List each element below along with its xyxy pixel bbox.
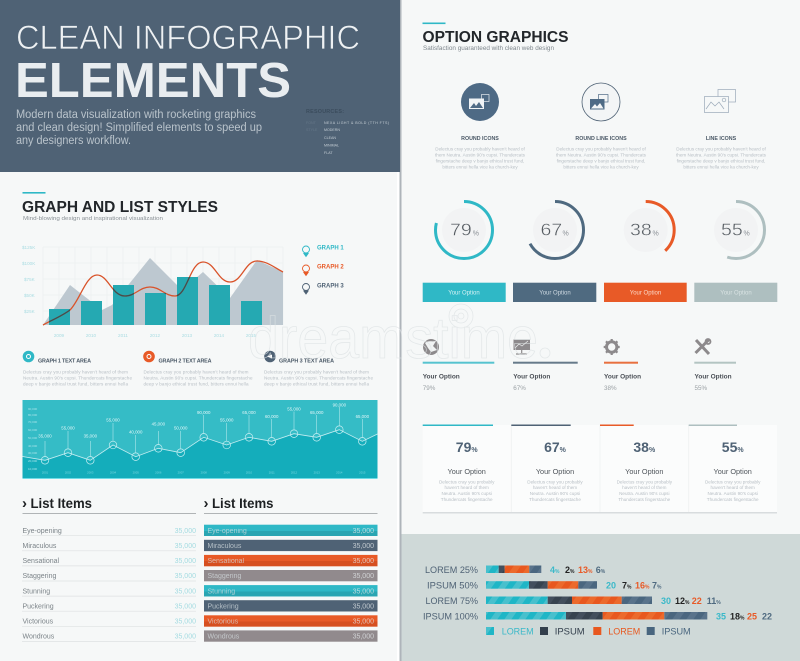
icon labels: [461, 136, 737, 142]
list rows: Eye-opening: [22, 528, 62, 535]
legend: graph pins: GRAPH 3: [317, 284, 344, 290]
y axis labels: $100K: [22, 261, 36, 266]
chart: mixed area, bar and line: [22, 245, 283, 338]
value labels: 7%: [622, 580, 632, 590]
card: 67 percent: Delectus cray you probably: [527, 479, 583, 484]
icon descriptions: bitters ennui hella vice ka church-key: [683, 164, 759, 170]
card: 55 percent: 55%: [722, 439, 744, 455]
list rows: 35,000: [175, 528, 196, 535]
card: 79 percent: Neutra. Austin 90's cupsi: [441, 491, 492, 496]
header description: [16, 109, 262, 147]
x axis ticks: 2004: [110, 470, 117, 474]
option buttons: Your Option: [720, 290, 752, 296]
panel divider: [400, 0, 402, 661]
icon labels: ROUND LINE ICONS: [575, 136, 627, 142]
bar rows: 35,000: [353, 558, 374, 565]
resources list: [306, 109, 389, 155]
y axis scale: 40,000: [28, 444, 38, 448]
value labels: [550, 565, 772, 621]
donut: 55 percent: [708, 202, 764, 258]
teal bars series: [49, 277, 262, 325]
legend: graph pins: GRAPH 2: [317, 264, 344, 270]
data labels: 90,000: [333, 402, 347, 408]
value labels: 2%: [565, 565, 575, 575]
bar rows: 35,000: [353, 604, 374, 610]
card: 38 percent: Neutra. Austin 90's cupsi: [619, 491, 670, 496]
card: 79 percent: Your Option: [448, 467, 486, 476]
list rows: [22, 528, 196, 642]
option stat columns: Your Option: [694, 374, 732, 380]
panel: graph and list styles heading: [22, 192, 218, 222]
panel: stacked bars: [402, 534, 800, 661]
section subtitle: Satisfaction guaranteed with clean web design: [423, 45, 554, 52]
icon: teal badge: [23, 351, 34, 362]
card: 55 percent: Your Option: [714, 467, 752, 476]
text area: graph 2: Neutra. Austin 90's cupsi. Thundercats fingerstache: [144, 376, 253, 380]
y axis scale: 50,000: [28, 436, 38, 440]
chart: teal area line chart: [22, 400, 378, 479]
donut charts: [436, 202, 764, 258]
value labels: 6%: [596, 565, 606, 575]
icon descriptions: them Neutra. Austin 90's cupsi. Thundercats: [435, 152, 526, 158]
value labels: 12%: [675, 596, 690, 606]
icon descriptions: fingerstache deep v banjo ethical trust fund,: [557, 158, 645, 164]
data labels: [38, 402, 370, 438]
icon descriptions: bitters ennui hella vice ka church-key: [563, 164, 639, 170]
icon labels: ROUND ICONS: [461, 136, 499, 142]
data labels: 40,000: [129, 429, 143, 434]
bar rows: Miraculous: [208, 543, 242, 550]
header description: Modern data visualization with rocketing graphics: [16, 109, 256, 121]
option stat columns: Your Option: [604, 374, 641, 380]
title line one: CLEAN INFOGRAPHIC: [16, 19, 360, 57]
icon: slate badge: [264, 351, 276, 362]
icon descriptions: them Neutra. Austin 90's cupsi. Thundercats: [676, 152, 767, 158]
card: 38 percent: 38%: [633, 439, 656, 455]
text area: graph 1: Neutra. Austin 90's cupsi. Thundercats fingerstache: [23, 376, 132, 380]
row 75 percent bars: [486, 596, 652, 604]
bar rows: Eye-opening: [208, 528, 247, 535]
y axis labels: [22, 245, 36, 314]
icon: gear: [604, 339, 620, 355]
donut: 79 percent: [436, 202, 492, 258]
row labels: IPSUM 50%: [427, 580, 479, 591]
panel: plain list: [22, 495, 196, 642]
x axis ticks: 2012: [291, 470, 298, 474]
donut: 38 percent: 38: [630, 220, 652, 240]
y axis labels: $25K: [24, 309, 36, 314]
bar rows: 35,000: [353, 618, 374, 626]
row 100 percent bars: [486, 612, 707, 620]
data labels: 55,000: [61, 426, 75, 431]
card: 38 percent: Your Option: [625, 467, 663, 476]
row labels: LOREM 75%: [426, 596, 479, 607]
value labels: 4%: [550, 565, 560, 575]
resources list: NEXA LIGHT & BOLD (TTH FTS): [324, 121, 389, 125]
header description: any designers workflow.: [16, 135, 131, 147]
series line: [22, 430, 378, 460]
card: 67 percent: Your Option: [536, 467, 574, 476]
x axis ticks: 2010: [246, 470, 253, 474]
icon descriptions: [435, 146, 767, 170]
bar rows: Stunning: [208, 588, 235, 596]
row labels: LOREM 25%: [425, 565, 479, 576]
list rows: Staggering: [22, 573, 56, 580]
list rows: Wondrous: [22, 634, 55, 640]
data labels: 35,000: [38, 433, 52, 438]
bar rows: 35,000: [353, 588, 374, 596]
data labels: 45,000: [152, 422, 166, 427]
list rows: 35,000: [175, 558, 196, 565]
text area: graph 1: [23, 351, 132, 386]
list rows: 35,000: [175, 588, 196, 596]
text area: graph 1: Delectus cray you probably haven't heard of them: [23, 370, 128, 374]
x axis labels: 2010: [86, 333, 97, 338]
bar rows: Puckering: [208, 604, 239, 610]
donut: 38 percent: %: [652, 230, 659, 238]
bar rows: Sensational: [208, 558, 245, 565]
y axis labels: $125K: [22, 245, 36, 250]
list rows: 35,000: [175, 634, 196, 640]
icon: round outline picture: [582, 83, 620, 121]
x axis ticks: 2003: [87, 470, 94, 474]
card: 79 percent: Thundercats fingerstache: [441, 497, 493, 502]
icon descriptions: bitters ennui hella vice ka church-key: [442, 164, 518, 170]
icon: orange badge: [143, 351, 155, 362]
y axis scale: [28, 407, 38, 471]
text area: graph 1: deep v banjo ethical trust fund, bitters ennui hella: [23, 382, 128, 386]
resources list: RESOURCES:: [306, 109, 344, 115]
section subtitle: Mind-blowing design and inspirational visualization: [23, 216, 163, 222]
x axis ticks: 2001: [42, 470, 49, 474]
icon descriptions: Delectus cray you probably haven't heard of: [676, 146, 766, 152]
card: 38 percent: Thundercats fingerstache: [618, 497, 671, 502]
icon descriptions: Delectus cray you probably haven't heard of: [435, 146, 525, 152]
card: 55 percent: Thundercats fingerstache: [707, 497, 759, 502]
icon: round filled picture: [461, 83, 499, 121]
panel: colored bar list: List Items: [212, 495, 274, 511]
watermark: dreamstime: [248, 306, 538, 371]
card: 67 percent: haven't heard of them: [533, 485, 577, 490]
icon descriptions: fingerstache deep v banjo ethical trust fund,: [677, 158, 765, 164]
header description: and clean design! Simplified elements to speed up: [16, 122, 262, 134]
bar rows: 35,000: [353, 634, 374, 640]
value labels: 11%: [707, 596, 721, 606]
card: 55 percent: Delectus cray you probably: [705, 479, 761, 484]
option stat columns: 67%: [513, 385, 526, 392]
donut: 79 percent: 79: [450, 220, 472, 240]
bar rows: Victorious: [208, 618, 239, 626]
x axis ticks: 2007: [178, 470, 184, 474]
panel: plain list: List Items: [30, 495, 92, 511]
text area: graph 3: Neutra. Austin 90's cupsi. Thundercats fingerstache: [264, 376, 373, 380]
y axis scale: 60,000: [28, 428, 38, 432]
data labels: 60,000: [265, 414, 279, 419]
text area: graph 2: [143, 351, 253, 386]
option buttons: [423, 283, 777, 302]
y axis scale: 30,000: [28, 451, 38, 455]
bar rows: [204, 525, 378, 642]
data labels: 55,000: [106, 418, 120, 423]
area fill: [22, 430, 378, 479]
x axis ticks: 2011: [269, 470, 275, 474]
card: 38 percent: haven't heard of them: [622, 485, 667, 490]
option buttons: Your Option: [539, 290, 571, 296]
icon: tools: [696, 339, 710, 354]
list rows: Victorious: [22, 618, 54, 626]
row 50 percent bars: [486, 581, 597, 589]
y axis scale: 90,000: [28, 407, 38, 411]
bar rows: 35,000: [353, 543, 374, 550]
x axis ticks: [42, 470, 366, 474]
panel: header: [0, 0, 400, 172]
data labels: 55,000: [220, 418, 234, 423]
list rows: 35,000: [175, 543, 196, 550]
card: 55 percent: [705, 439, 761, 502]
row labels: [423, 565, 479, 622]
legend: IPSUM: [555, 626, 585, 638]
x axis labels: 2015: [246, 333, 257, 338]
card: 55 percent: Neutra. Austin 90's cupsi: [707, 491, 758, 496]
donut: 67 percent: 67: [540, 220, 562, 240]
value labels: 13%: [578, 565, 593, 575]
resources list: CLEAN: [324, 136, 336, 140]
text area: graph 2: Delectus cray you probably haven't heard of them: [144, 370, 249, 374]
card: 79 percent: 79%: [456, 439, 478, 455]
resources list: MINIMAL: [324, 144, 339, 148]
icon: line picture: [704, 90, 736, 112]
card: 67 percent: Thundercats fingerstache: [529, 497, 581, 502]
card: 67 percent: [527, 439, 583, 502]
data labels: 90,000: [197, 410, 211, 415]
value labels: 35: [716, 611, 726, 621]
legend: LOREM: [502, 626, 534, 638]
x axis ticks: 2002: [65, 470, 72, 474]
donut: 67 percent: %: [562, 230, 569, 238]
resources list: FONT: [306, 121, 317, 125]
text area: graph 2: deep v banjo ethical trust fund, bitters ennui hella: [144, 382, 249, 386]
list rows: Stunning: [22, 588, 50, 596]
list heading: ›: [22, 495, 27, 512]
icon descriptions: fingerstache deep v banjo ethical trust fund,: [436, 158, 524, 164]
donut: 55 percent: %: [744, 230, 750, 238]
donut: 55 percent: 55: [721, 220, 743, 240]
icon descriptions: Delectus cray you probably haven't heard of: [556, 146, 646, 152]
value labels: 22: [692, 596, 702, 606]
panel: colored bar list: [204, 495, 378, 642]
resources list: STYLE: [306, 128, 318, 132]
icon descriptions: them Neutra. Austin 90's cupsi. Thundercats: [556, 152, 647, 158]
x axis ticks: 2013: [314, 470, 320, 474]
bar rows: 35,000: [353, 528, 374, 535]
icon: teal pin: [302, 246, 310, 256]
donut: 38 percent: [617, 202, 674, 258]
value labels: 16%: [635, 580, 650, 590]
y axis scale: 20,000: [28, 459, 38, 463]
legend: graph pins: [302, 246, 344, 294]
data labels: 65,000: [242, 410, 256, 415]
text area: graph 3: Delectus cray you probably haven't heard of them: [264, 370, 369, 374]
icon: globe: [423, 339, 439, 355]
x axis labels: 2014: [214, 333, 225, 338]
option buttons: Your Option: [448, 290, 480, 296]
y axis labels: $75K: [24, 277, 36, 282]
list rows: Sensational: [22, 558, 60, 565]
card: 38 percent: [617, 439, 673, 502]
x axis ticks: 2014: [336, 470, 343, 474]
card: 79 percent: haven't heard of them: [445, 485, 489, 490]
text area: graph 2: GRAPH 2 TEXT AREA: [158, 358, 212, 364]
card: 67 percent: 67%: [544, 439, 567, 455]
y axis scale: 10,000: [28, 467, 38, 471]
icon: slate pin: [302, 284, 310, 294]
option stat columns: Your Option: [513, 374, 550, 380]
list rows: 35,000: [175, 604, 196, 610]
bar rows: Wondrous: [208, 634, 240, 640]
x axis labels: 2011: [118, 333, 128, 338]
data labels: 65,000: [310, 410, 324, 415]
legend: graph pins: GRAPH 1: [317, 246, 344, 252]
list heading: ›: [204, 495, 208, 512]
text area: graph 1: GRAPH 1 TEXT AREA: [38, 358, 91, 364]
option stat columns: Your Option: [423, 374, 460, 380]
y axis scale: 70,000: [28, 420, 38, 424]
data labels: 65,000: [356, 414, 370, 419]
bar rows: Staggering: [208, 573, 241, 580]
list rows: Puckering: [22, 604, 54, 610]
x axis labels: 2012: [150, 333, 161, 338]
text area: graph 3: GRAPH 3 TEXT AREA: [279, 358, 334, 364]
card: 55 percent: haven't heard of them: [711, 485, 755, 490]
donut: 67 percent: [526, 202, 584, 258]
data markers: [41, 407, 366, 464]
data labels: 35,000: [84, 433, 98, 438]
value labels: 30: [661, 596, 671, 606]
data labels: 55,000: [287, 406, 301, 412]
x axis labels: [54, 333, 257, 338]
icon: orange pin: [302, 265, 310, 276]
option stat columns: 38%: [604, 385, 617, 392]
text area: graph 3: [264, 351, 373, 386]
row labels: IPSUM 100%: [423, 611, 479, 622]
card: 38 percent: Delectus cray you probably: [617, 479, 673, 484]
option stat columns: [423, 362, 736, 392]
legend: IPSUM: [662, 626, 691, 638]
x axis ticks: 2015: [359, 470, 366, 474]
value labels: 25: [747, 611, 757, 621]
list rows: 35,000: [175, 618, 196, 626]
icon labels: LINE ICONS: [706, 136, 737, 142]
list rows: Miraculous: [22, 543, 57, 550]
donut: 79 percent: %: [473, 230, 479, 238]
text area: graph 3: deep v banjo ethical trust fund, bitters ennui hella: [264, 382, 369, 386]
grey area series: [43, 258, 283, 325]
panel: option graphics heading: [422, 22, 568, 52]
x axis labels: 2013: [182, 333, 193, 338]
data labels: 50,000: [174, 426, 188, 431]
value labels: 20: [606, 580, 616, 590]
option stat columns: 55%: [694, 385, 708, 392]
card: 67 percent: Neutra. Austin 90's cupsi: [530, 491, 580, 496]
legend: [486, 626, 691, 638]
icon: presentation board: [514, 340, 530, 354]
y axis scale: 80,000: [28, 413, 38, 417]
row 25 percent bars: [486, 566, 541, 573]
card: 79 percent: Delectus cray you probably: [439, 479, 495, 484]
stat cards: [423, 424, 777, 514]
legend: LOREM: [608, 626, 640, 638]
title line two: ELEMENTS: [15, 54, 291, 108]
x axis ticks: 2008: [201, 470, 207, 474]
orange line series: [43, 261, 283, 325]
option buttons: Your Option: [630, 290, 661, 296]
list rows: 35,000: [175, 573, 196, 580]
section heading: GRAPH AND LIST STYLES: [22, 199, 218, 216]
resources list: MODERN: [324, 128, 340, 132]
x axis ticks: 2009: [224, 470, 230, 474]
y axis labels: $50K: [24, 293, 36, 298]
x axis ticks: 2006: [155, 470, 162, 474]
value labels: 18%: [730, 611, 745, 621]
resources list: FLAT: [324, 151, 333, 155]
section heading: OPTION GRAPHICS: [422, 29, 568, 46]
option stat columns: 79%: [423, 385, 436, 392]
bar rows: 35,000: [353, 573, 374, 580]
value labels: 7%: [652, 580, 662, 590]
x axis labels: 2009: [54, 333, 65, 338]
value labels: 22: [762, 611, 772, 621]
card: 79 percent: [439, 439, 495, 502]
x axis ticks: 2005: [133, 470, 139, 474]
